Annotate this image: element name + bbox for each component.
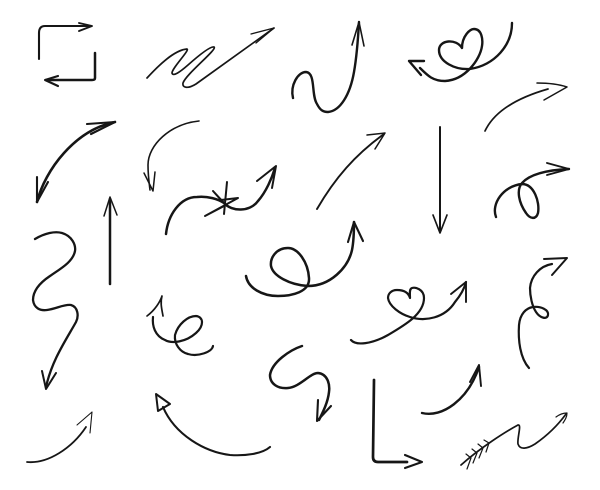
arrow: straight down — [433, 127, 447, 233]
arrow: square loop top — [39, 23, 92, 59]
arrow: thin bottom left curve — [27, 412, 92, 462]
arrow: curl with small head — [147, 296, 213, 355]
arrow: thin curve down — [144, 121, 199, 191]
arrow: triangle head — [156, 394, 270, 455]
arrow: diagonal curve up right — [317, 133, 385, 209]
arrow: heart loop left — [409, 23, 512, 81]
arrow: heart loop right — [351, 282, 466, 343]
arrow: wavy down — [33, 232, 78, 389]
icon: triangle arrowhead — [156, 394, 170, 411]
arrow: scribble up right — [147, 28, 274, 87]
arrow: curved sweep with double heads — [37, 122, 115, 202]
icon: star — [205, 182, 238, 216]
icon: arrow fletching — [466, 440, 489, 469]
arrow: square loop bottom — [45, 53, 95, 86]
arrow: small loop up right — [519, 258, 567, 368]
arrow: loop right — [495, 163, 569, 218]
arrow: thin curve right — [485, 83, 567, 131]
arrow: L shape — [373, 380, 422, 468]
arrow: star loop — [166, 166, 276, 234]
arrow: short curve up — [422, 365, 481, 414]
arrow: S curve down — [270, 346, 331, 421]
arrow: feathered wave — [461, 413, 567, 469]
arrow: wavy up — [292, 22, 364, 112]
arrow: centre loop up — [246, 222, 363, 296]
arrow: straight up — [104, 197, 117, 284]
